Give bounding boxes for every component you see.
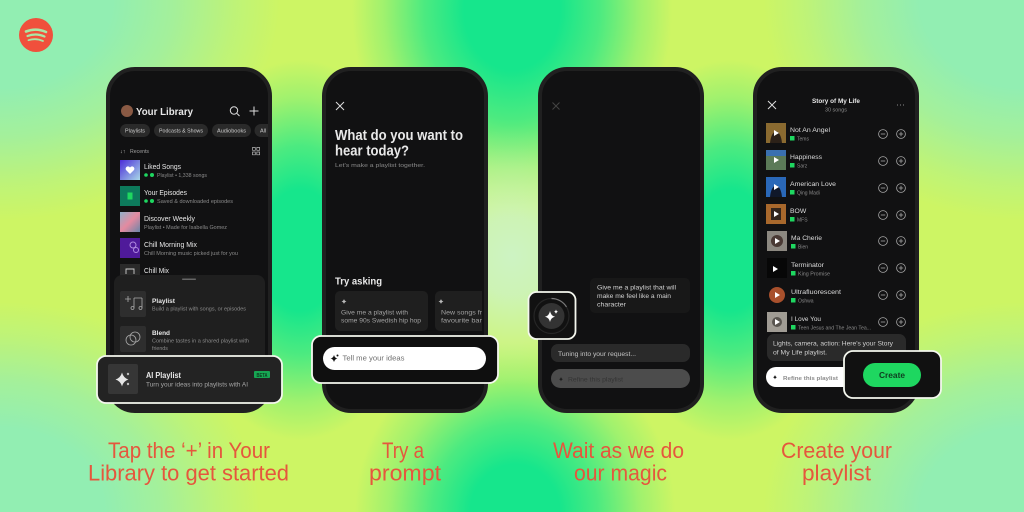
song: American Love <box>766 177 905 197</box>
filter chips: Playlists <box>125 128 145 134</box>
phone 4: create <box>755 69 941 411</box>
recents row: ↓↑ <box>120 149 126 155</box>
song: I Love You: Teen Jesus and The Jean Tea... <box>798 326 871 332</box>
song: Ultrafluorescent: Oshwa <box>798 298 814 304</box>
caption 3: Wait as we do <box>553 438 684 463</box>
chat bubble: character <box>597 302 627 308</box>
sheet option: Blend <box>120 326 249 352</box>
song: Ultrafluorescent <box>769 287 905 304</box>
refine input <box>766 367 866 387</box>
filter chips: Podcasts & Shows <box>159 128 203 134</box>
close icon <box>336 102 344 110</box>
sheet option: Playlist: Playlist <box>152 298 176 305</box>
song: Terminator: King Promise <box>798 272 830 278</box>
highlight: input: Tell me your ideas <box>342 356 405 362</box>
song: I Love You: I Love You <box>791 316 821 323</box>
song: Ultrafluorescent: Ultrafluorescent <box>791 289 841 296</box>
try asking heading: Try asking <box>335 276 382 288</box>
song: Happiness: Sarz <box>797 164 808 170</box>
playlist title: Story of My Life <box>812 98 860 105</box>
library item: Discover Weekly <box>120 212 227 232</box>
sheet option: Blend: friends <box>152 346 168 352</box>
library item: Your Episodes <box>120 186 233 206</box>
caption 2: prompt <box>369 460 442 486</box>
caption 1 <box>88 438 289 486</box>
filter chips: Audiobooks <box>217 128 246 134</box>
recents row: Recents <box>130 149 149 155</box>
chat bubble: make me feel like a main <box>597 293 671 300</box>
caption 4 <box>781 438 892 486</box>
prompt cards <box>335 291 495 331</box>
sheet option: Blend: Combine tastes in a shared playlist with <box>152 338 249 344</box>
library item: Discover Weekly: Playlist • Made for Isabella Gomez <box>144 225 227 231</box>
song: BOW: BOW <box>790 208 807 215</box>
Spotify logo <box>19 18 53 52</box>
library item: Liked Songs <box>120 160 207 180</box>
recents row <box>120 148 260 155</box>
library header: Your Library <box>136 106 193 118</box>
heading: hear today? <box>335 144 409 160</box>
song: Happiness: Happiness <box>790 154 823 161</box>
song: BOW: MFS <box>797 218 808 224</box>
library item: Chill Morning Mix: Chill Morning Mix <box>144 242 197 249</box>
chat bubble <box>590 278 690 313</box>
bottom sheet <box>114 275 265 409</box>
status pill <box>551 344 690 362</box>
highlight: create button: Create <box>879 371 906 380</box>
caption 2 <box>369 438 442 486</box>
highlight: AI Playlist: Turn your ideas into playlists with AI <box>146 382 248 388</box>
filter chips: All <box>260 128 266 134</box>
phone 4 body <box>755 69 917 411</box>
playlist title <box>812 98 860 114</box>
phone 2: prompt <box>312 69 498 411</box>
sheet option: Playlist: Build a playlist with songs, or episodes <box>152 306 246 312</box>
song: American Love: Qing Madi <box>797 190 820 196</box>
song: Not An Angel: Not An Angel <box>790 127 830 134</box>
prompt cards: New songs fr <box>441 310 483 316</box>
song: Ma Cherie <box>767 231 905 251</box>
phone 3: waiting <box>528 69 702 411</box>
more menu <box>897 104 904 106</box>
song: I Love You <box>767 312 905 332</box>
song: Happiness <box>766 150 905 170</box>
library item: Chill Morning Mix: Chill Morning music picked just for you <box>144 251 238 257</box>
caption 1: Tap the ‘+’ in Your <box>108 438 270 463</box>
highlight: loading spinner <box>528 292 576 339</box>
chat bubble: Give me a playlist that will <box>597 284 677 292</box>
refine input: Refine this playlist <box>783 376 838 382</box>
library item: Chill Morning Mix <box>120 238 238 258</box>
song: BOW <box>766 204 905 224</box>
song: Ma Cherie: Bien <box>798 244 808 250</box>
close icon <box>552 102 560 110</box>
close icon <box>768 101 776 109</box>
caption 4: Create your <box>781 438 892 463</box>
library item: Discover Weekly: Discover Weekly <box>144 216 195 223</box>
library item: Chill Mix <box>120 264 169 278</box>
phone 2 body <box>324 69 486 411</box>
heading: What do you want to <box>335 128 463 144</box>
song: American Love: American Love <box>790 181 836 188</box>
library header <box>121 105 258 118</box>
prompt cards: favourite bar <box>441 318 483 324</box>
message box: of My Life playlist. <box>773 350 827 356</box>
phone 1 body <box>108 69 270 411</box>
highlight: input <box>312 336 498 383</box>
song: Not An Angel: Tems <box>797 136 809 142</box>
message box: Lights, camera, action: Here's your Story <box>773 340 894 348</box>
subheading: Let's make a playlist together. <box>335 163 426 169</box>
song: Ma Cherie: Ma Cherie <box>791 235 822 242</box>
library item: Liked Songs: Liked Songs <box>144 164 181 171</box>
refine input disabled: Refine this playlist <box>568 376 623 384</box>
highlight: create button <box>844 351 941 398</box>
caption 3: our magic <box>574 460 667 486</box>
prompt cards: Give me a playlist with <box>341 310 408 316</box>
caption 2: Try a <box>382 438 424 463</box>
prompt cards: some 90s Swedish hip hop <box>341 318 421 324</box>
library item: Your Episodes: Saved & downloaded episodes <box>157 199 233 205</box>
library item: Chill Mix: Chill Mix <box>144 268 169 275</box>
library item: Your Episodes: Your Episodes <box>144 190 187 197</box>
caption 4: playlist <box>802 460 872 486</box>
filter chips <box>120 124 268 137</box>
status pill: Tuning into your request... <box>558 351 636 358</box>
refine input disabled <box>551 369 690 388</box>
song: Not An Angel <box>766 123 905 143</box>
message box <box>767 334 906 361</box>
highlight: AI Playlist: BETA <box>256 373 268 379</box>
sheet option: Playlist <box>120 291 246 317</box>
caption 3 <box>553 438 684 486</box>
playlist title: 30 songs <box>825 108 848 114</box>
caption 1: Library to get started <box>88 460 289 486</box>
library item: Liked Songs: Playlist • 1,338 songs <box>157 173 207 179</box>
song: Terminator: Terminator <box>791 262 825 269</box>
highlight: AI Playlist: AI Playlist <box>146 371 181 380</box>
phone 1: Your Library <box>97 69 282 411</box>
heading <box>335 128 463 160</box>
sheet option: Blend: Blend <box>152 330 170 337</box>
song: Terminator <box>767 258 905 278</box>
highlight: AI Playlist <box>97 356 282 403</box>
phone 3 body <box>540 69 702 411</box>
